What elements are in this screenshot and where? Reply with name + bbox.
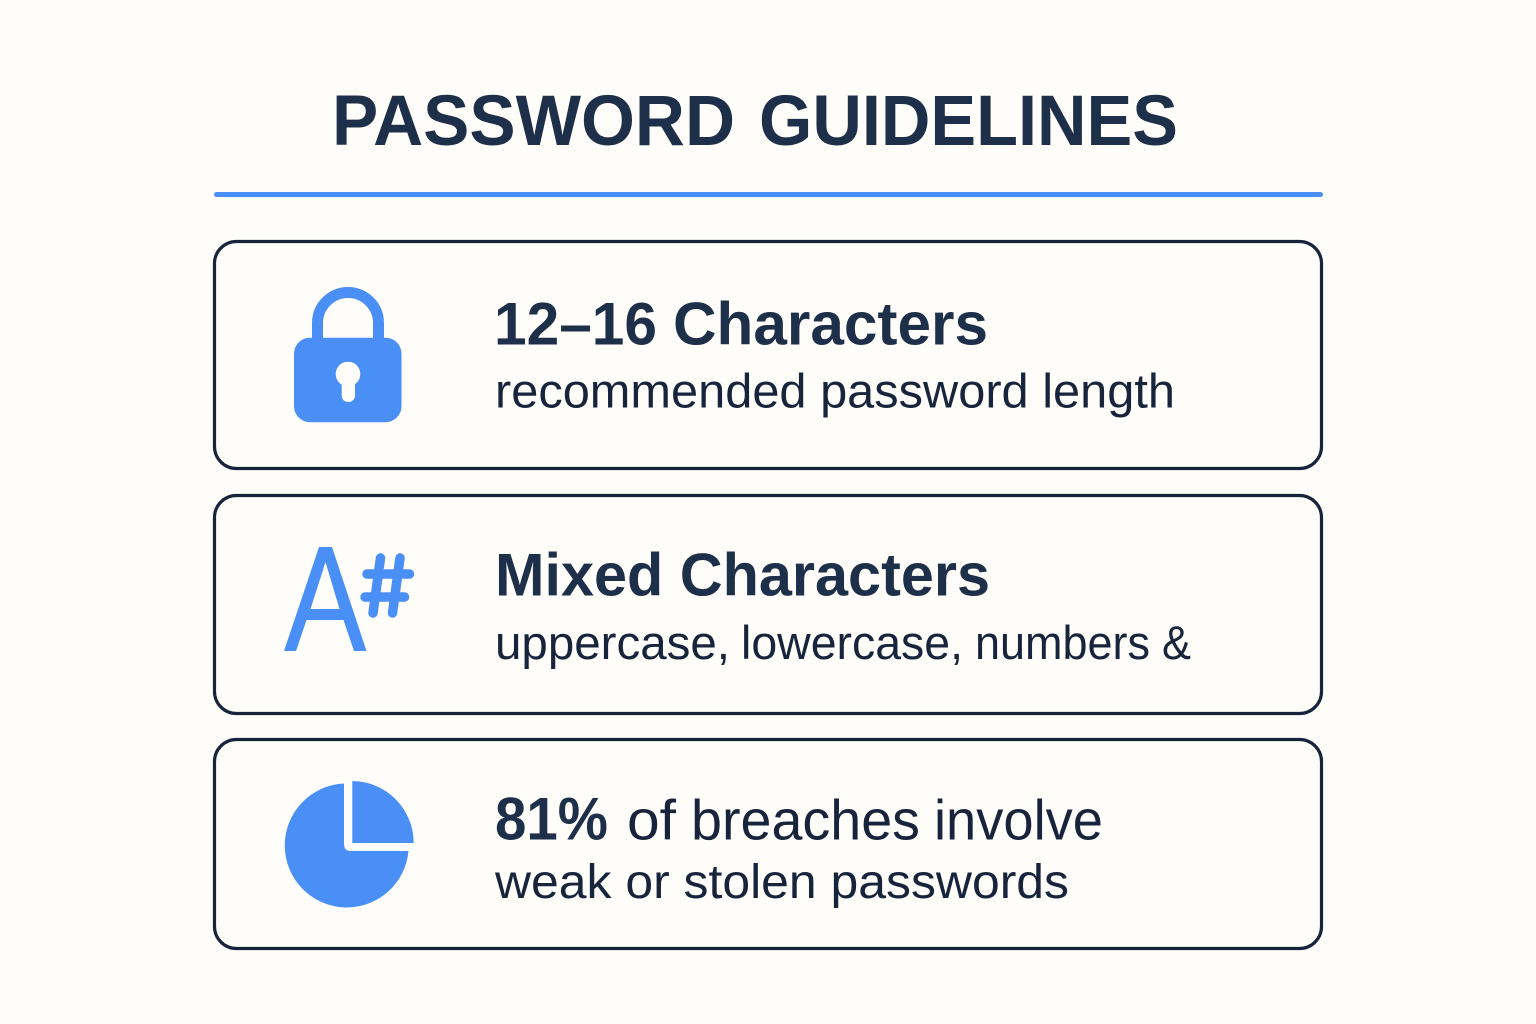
heading: 12–16 characters: 12–16 bbox=[494, 290, 657, 358]
panel: mixed characters bbox=[214, 496, 1322, 714]
heading: 81% of breaches involve bbox=[495, 786, 1103, 852]
text: uppercase, lowercase, numbers &: uppercase, bbox=[495, 616, 730, 669]
text: uppercase, lowercase, numbers &: & bbox=[1162, 616, 1191, 669]
heading: 12–16 characters bbox=[494, 290, 988, 358]
title underline bbox=[214, 192, 1323, 197]
text: recommended password length: recommended password length bbox=[495, 366, 1175, 419]
text: uppercase, lowercase, numbers & bbox=[495, 616, 1191, 669]
heading: 81% of breaches involve: 81% bbox=[495, 786, 608, 852]
text: uppercase, lowercase, numbers &: lowercase, bbox=[741, 616, 963, 669]
heading: 81% of breaches involve: breaches bbox=[691, 788, 920, 852]
panel: password length bbox=[214, 242, 1322, 468]
icon: letter A and hash bbox=[284, 547, 410, 651]
text: uppercase, lowercase, numbers &: numbers bbox=[975, 616, 1150, 669]
heading: 12–16 characters: Characters bbox=[673, 290, 988, 358]
icon: pie chart bbox=[285, 781, 414, 907]
title: PASSWORD bbox=[332, 82, 735, 161]
panel: breaches statistic bbox=[214, 740, 1322, 948]
title bbox=[332, 82, 1178, 161]
icon: padlock bbox=[294, 292, 402, 422]
title: GUIDELINES bbox=[759, 82, 1178, 161]
card outline bbox=[214, 740, 1322, 948]
heading: mixed characters: Mixed Characters bbox=[495, 542, 990, 608]
text: weak or stolen passwords: weak or stolen passwords bbox=[494, 856, 1069, 909]
heading: 81% of breaches involve: of bbox=[627, 788, 676, 852]
card outline bbox=[214, 496, 1322, 714]
card outline bbox=[214, 242, 1322, 468]
heading: 81% of breaches involve: involve bbox=[934, 788, 1103, 852]
